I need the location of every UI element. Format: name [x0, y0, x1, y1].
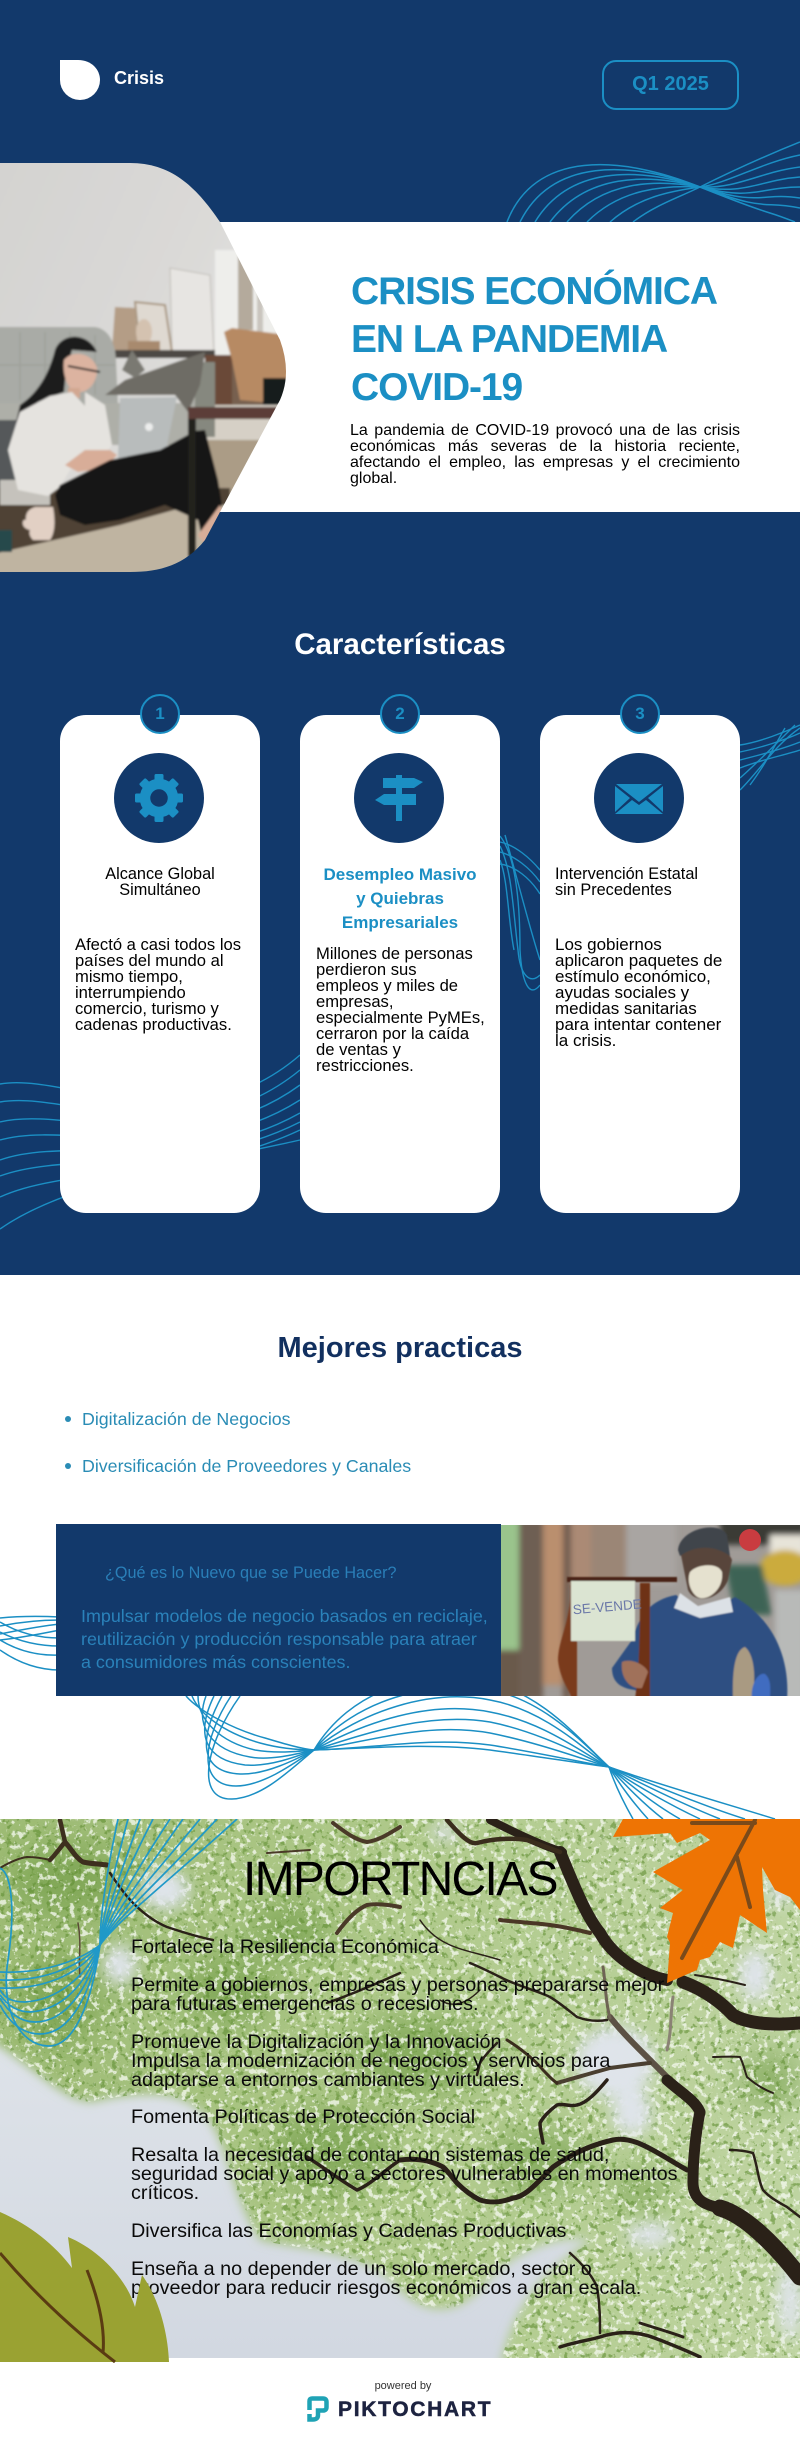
card 3 body — [555, 935, 722, 1050]
callout question: ¿Qué es lo Nuevo que se Puede Hacer? — [105, 1564, 397, 1582]
number badge 2: 2 — [395, 704, 405, 723]
item 7: proveedor para reducir riesgos económicos a gran escala. — [131, 2277, 641, 2299]
card 2 title — [323, 865, 477, 932]
decorative orange leaf — [613, 1819, 800, 1983]
section heading: IMPORTNCIAS: IMPORTNCIAS — [243, 1853, 557, 1906]
card 2 body: empleos y miles de — [316, 976, 458, 995]
card 3 title: Intervención Estatal — [555, 865, 698, 883]
callout text — [81, 1606, 488, 1672]
card 1 body: mismo tiempo, — [75, 967, 183, 986]
wave lines: best practices section — [0, 1616, 776, 1819]
card 3 body: Los gobiernos — [555, 935, 662, 954]
item 5: Resalta la necesidad de contar con sistemas de salud, — [131, 2144, 609, 2166]
card 1 body: interrumpiendo — [75, 983, 186, 1002]
wave lines: over tree photo — [0, 1819, 238, 2047]
card 2 title: Empresariales — [342, 913, 458, 932]
wordmark: PIKTOCHART — [338, 2398, 492, 2421]
card 2 body: perdieron sus — [316, 960, 417, 979]
photo: man in mask selling table — [501, 1525, 800, 1696]
card 3 body: ayudas sociales y — [555, 983, 689, 1002]
item 3: Impulsa la modernización de negocios y servicios para — [131, 2050, 610, 2072]
card 3 body: aplicaron paquetes de — [555, 951, 722, 970]
card 2 body: empresas, — [316, 992, 393, 1011]
intro paragraph: La pandemia de COVID-19 provocó una de las crisis económicas más severas de la historia reciente, afectando el empleo, las empresas y el crecimiento global. — [350, 422, 740, 487]
callout text: Impulsar modelos de negocio basados en reciclaje, — [81, 1606, 488, 1626]
title — [351, 270, 717, 409]
card 1 body: comercio, turismo y — [75, 999, 219, 1018]
card 2 body — [316, 944, 485, 1075]
item 5 — [131, 2144, 678, 2204]
card 2 body: de ventas y — [316, 1040, 401, 1059]
navy callout panel — [56, 1524, 501, 1696]
item 7: Enseña a no depender de un solo mercado, sector o — [131, 2258, 592, 2280]
logo mark — [60, 60, 100, 100]
wave lines: behind characteristics cards — [0, 724, 800, 1230]
item 3: adaptarse a entornos cambiantes y virtuales. — [131, 2069, 525, 2091]
item 2: para futuras emergencias o recesiones. — [131, 1993, 478, 2015]
icon: envelope — [594, 753, 684, 843]
logo text: Crisis — [114, 68, 164, 88]
card 1 body: Afectó a casi todos los — [75, 935, 241, 954]
card 2 title: y Quiebras — [356, 889, 444, 908]
card 1 title — [105, 865, 215, 899]
card 1 body: cadenas productivas. — [75, 1015, 232, 1034]
white title band — [0, 222, 800, 512]
item 2: Permite a gobiernos, empresas y personas prepararse mejor — [131, 1974, 664, 1996]
number badge 2 — [380, 694, 420, 734]
tree photo background with foliage and branches — [0, 1819, 800, 2358]
callout text: a consumidores más conscientes. — [81, 1652, 350, 1672]
date badge: Q1 2025 — [632, 73, 709, 95]
header navy background — [0, 0, 800, 1275]
title: EN LA PANDEMIA — [351, 318, 667, 361]
item 3: Promueve la Digitalización y la Innovación — [131, 2031, 502, 2053]
card 2 — [300, 715, 500, 1213]
section heading: Características: Características — [294, 628, 506, 661]
title: CRISIS ECONÓMICA — [351, 270, 717, 312]
section heading: Mejores practicas: Mejores practicas — [277, 1332, 522, 1364]
card 1 body — [75, 935, 241, 1034]
footer: piktochart logo — [307, 2396, 492, 2422]
item 1: Fortalece la Resiliencia Económica — [131, 1936, 439, 1958]
icon: signpost — [354, 753, 444, 843]
number badge 3 — [620, 694, 660, 734]
callout text: reutilización y producción responsable para atraer — [81, 1629, 477, 1649]
icon: piktochart mark — [307, 2396, 329, 2422]
card 3 — [540, 715, 740, 1213]
card 1 — [60, 715, 260, 1213]
card 1 title: Simultáneo — [119, 881, 201, 899]
card 2 body: restricciones. — [316, 1056, 414, 1075]
card 2 body: cerraron por la caída — [316, 1024, 469, 1043]
card 3 body: la crisis. — [555, 1031, 616, 1050]
bullet list: Digitalización de Negocios — [82, 1409, 291, 1429]
card 1 body: países del mundo al — [75, 951, 224, 970]
icon: gear — [114, 753, 204, 843]
card 3 body: para intentar contener — [555, 1015, 721, 1034]
item 3 — [131, 2031, 610, 2091]
photo: man in mask selling table: SE-VENDE — [572, 1596, 642, 1617]
card 3 body: estímulo económico, — [555, 967, 711, 986]
item 5: seguridad social y apoyo a sectores vulnerables en momentos — [131, 2163, 678, 2185]
item 4: Fomenta Políticas de Protección Social — [131, 2106, 475, 2128]
footer: powered by: powered by — [375, 2380, 431, 2392]
item 6: Diversifica las Economías y Cadenas Productivas — [131, 2220, 566, 2242]
card 3 title — [555, 865, 698, 899]
number badge 3: 3 — [635, 704, 645, 723]
number badge 1 — [140, 694, 180, 734]
bullet list — [65, 1409, 411, 1476]
card 2 body: especialmente PyMEs, — [316, 1008, 485, 1027]
wave lines: header — [506, 141, 800, 222]
card 3 title: sin Precedentes — [555, 881, 672, 899]
item 7 — [131, 2258, 641, 2299]
hero photo: woman with laptop — [0, 163, 286, 572]
bullet list: Diversificación de Proveedores y Canales — [82, 1456, 411, 1476]
title: COVID-19 — [351, 366, 522, 409]
importance list — [131, 1936, 678, 2299]
card 3 body: medidas sanitarias — [555, 999, 697, 1018]
date badge — [602, 60, 739, 110]
card 2 title: Desempleo Masivo — [323, 865, 477, 884]
card 2 body: Millones de personas — [316, 944, 473, 963]
decorative olive leaf — [0, 2212, 169, 2363]
number badge 1: 1 — [155, 704, 165, 723]
item 2 — [131, 1974, 664, 2015]
card 1 title: Alcance Global — [105, 865, 215, 883]
item 5: críticos. — [131, 2182, 199, 2204]
